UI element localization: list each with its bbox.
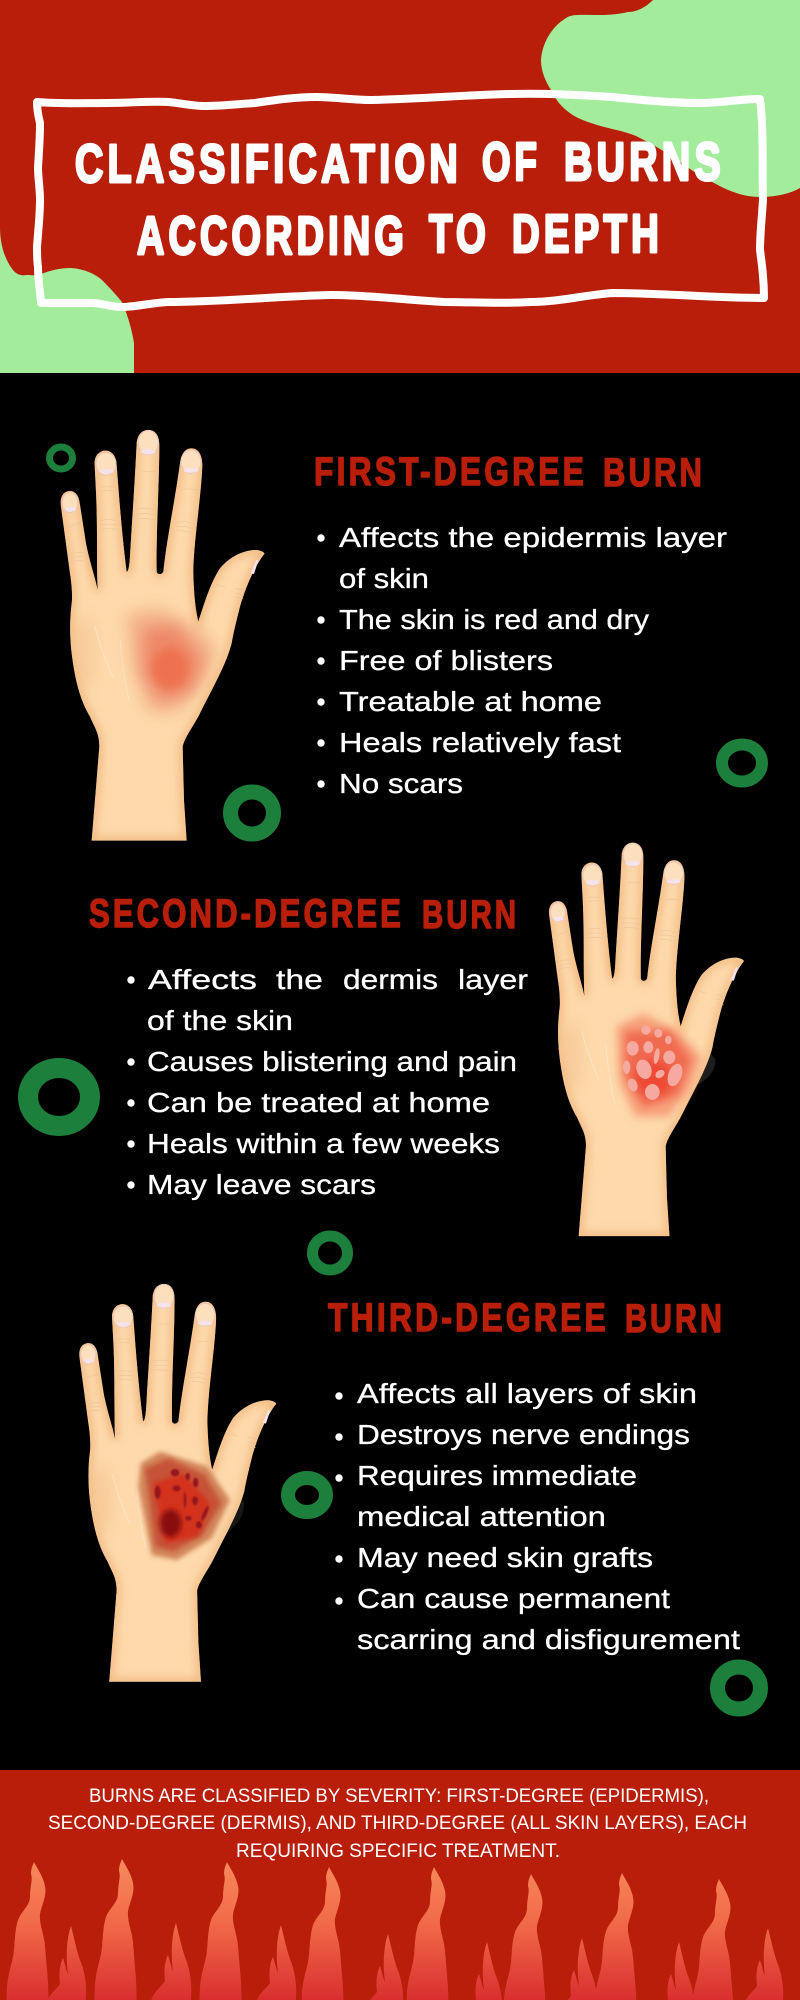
footer panel xyxy=(0,1770,800,2000)
title frame xyxy=(37,94,764,307)
hand illustration: third-degree burn xyxy=(79,1284,276,1682)
list: second-degree facts: Affects xyxy=(148,964,257,995)
list: third-degree facts: Destroys nerve endings xyxy=(357,1419,690,1450)
header panel xyxy=(0,0,800,373)
list: second-degree facts xyxy=(127,964,528,1200)
green blob top right xyxy=(541,0,800,197)
list: first-degree facts: Treatable at home xyxy=(339,686,602,717)
title: TO xyxy=(429,204,490,264)
hand illustration: first-degree burn xyxy=(61,430,264,841)
flames xyxy=(0,1855,800,2000)
list: third-degree facts: medical attention xyxy=(357,1501,606,1532)
panel: first-degree burn xyxy=(61,430,727,841)
list: first-degree facts: Free of blisters xyxy=(339,645,553,676)
panel: third-degree burn xyxy=(79,1284,740,1682)
title: ACCORDING xyxy=(137,206,408,266)
footer summary text: REQUIRING SPECIFIC TREATMENT. xyxy=(236,1841,560,1862)
list: first-degree facts: of skin xyxy=(339,563,429,594)
title xyxy=(75,132,725,266)
title: CLASSIFICATION xyxy=(75,134,462,194)
list: first-degree facts xyxy=(317,522,727,799)
heading: third-degree burn: THIRD-DEGREE xyxy=(328,1296,609,1340)
decorative green rings xyxy=(28,447,762,1709)
footer summary text: SECOND-DEGREE (DERMIS), AND THIRD-DEGREE (ALL SKIN LAYERS), EACH xyxy=(48,1813,747,1834)
list: first-degree facts: Heals relatively fast xyxy=(339,727,621,758)
list: third-degree facts: Requires immediate xyxy=(357,1460,637,1491)
green blob bottom left xyxy=(0,227,134,373)
heading: second-degree burn: SECOND-DEGREE xyxy=(89,892,404,936)
hand illustration: second-degree burn xyxy=(549,843,744,1236)
list: second-degree facts: of the skin xyxy=(147,1005,293,1036)
list: second-degree facts: the xyxy=(276,964,323,995)
panel: second-degree burn xyxy=(89,843,744,1236)
footer summary text xyxy=(48,1786,747,1862)
list: first-degree facts: No scars xyxy=(339,768,463,799)
list: second-degree facts: May leave scars xyxy=(147,1169,376,1200)
list: third-degree facts: scarring and disfigurement xyxy=(357,1624,740,1655)
list: third-degree facts: Can cause permanent xyxy=(357,1583,670,1614)
list: first-degree facts: Affects the epidermis layer xyxy=(339,522,727,553)
list: second-degree facts: dermis xyxy=(343,964,438,995)
heading: first-degree burn: FIRST-DEGREE xyxy=(314,450,587,494)
list: second-degree facts: Causes blistering and pain xyxy=(147,1046,517,1077)
heading: first-degree burn: BURN xyxy=(603,451,705,495)
title: BURNS xyxy=(564,132,725,192)
list: second-degree facts: Heals within a few weeks xyxy=(147,1128,500,1159)
list: first-degree facts: The skin is red and dry xyxy=(339,604,649,635)
list: second-degree facts: layer xyxy=(458,964,528,995)
list: third-degree facts xyxy=(335,1378,740,1655)
list: third-degree facts: May need skin grafts xyxy=(357,1542,653,1573)
footer summary text: BURNS ARE CLASSIFIED BY SEVERITY: FIRST-DEGREE (EPIDERMIS), xyxy=(89,1786,709,1807)
heading: third-degree burn: BURN xyxy=(625,1297,725,1341)
list: second-degree facts: Can be treated at home xyxy=(147,1087,490,1118)
title: DEPTH xyxy=(512,204,663,264)
title: OF xyxy=(482,132,541,192)
list: third-degree facts: Affects all layers of skin xyxy=(357,1378,697,1409)
heading: second-degree burn: BURN xyxy=(422,893,519,937)
